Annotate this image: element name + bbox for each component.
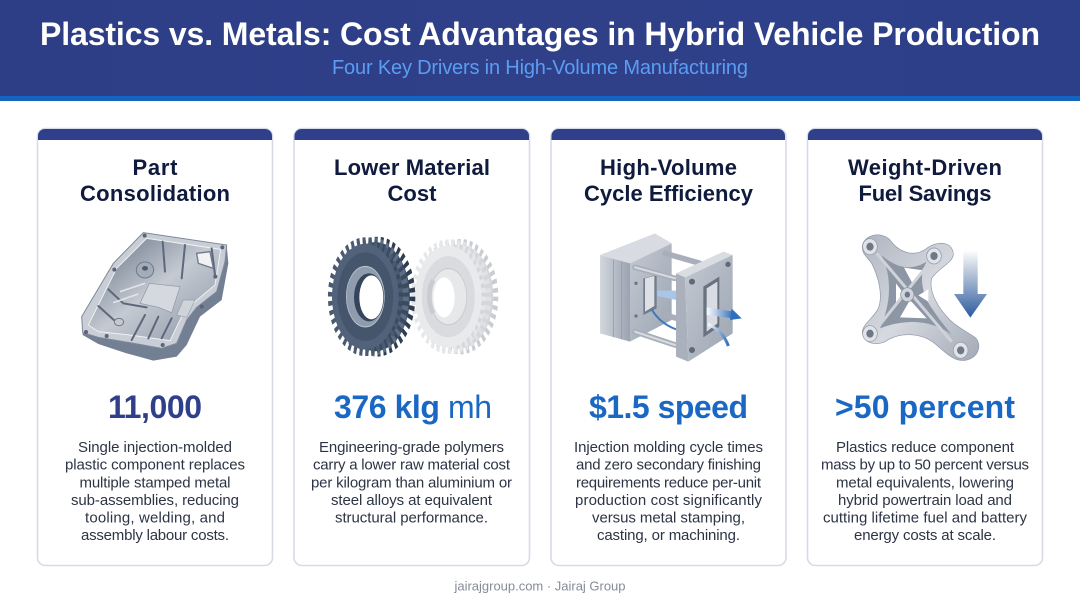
heading: part consolidation: Part <box>132 155 178 180</box>
panel: high-volume cycle efficiency <box>551 128 786 566</box>
icon: lightweight bracket with down arrow <box>862 235 987 360</box>
body text: weight-driven fuel savings: energy costs at scale. <box>854 527 996 544</box>
heading: weight-driven fuel savings: Fuel Savings <box>858 181 992 206</box>
subtitle: Four Key Drivers in High-Volume Manufacturing <box>332 57 748 79</box>
heading: part consolidation: Consolidation <box>80 181 230 206</box>
body text: weight-driven fuel savings: Plastics reduce component <box>836 439 1015 456</box>
header band <box>0 0 1080 101</box>
icon: metal oil pan <box>82 233 228 361</box>
body text: high-volume cycle efficiency: versus metal stamping, <box>592 510 745 526</box>
icon: injection mold <box>600 233 742 362</box>
body text: part consolidation: multiple stamped metal <box>80 474 230 492</box>
arrow: weight reduction <box>954 250 987 318</box>
body text: part consolidation <box>65 439 245 544</box>
footer: jairajgroup.com · Jairaj Group <box>454 578 626 594</box>
body text: lower material cost <box>311 439 512 526</box>
panel: weight-driven fuel savings <box>808 128 1042 566</box>
body text: lower material cost: structural performance. <box>335 510 488 526</box>
panel: lower material cost <box>294 128 530 566</box>
body text: part consolidation: tooling, welding, and <box>85 510 225 526</box>
heading: high-volume cycle efficiency <box>584 155 754 206</box>
title: Plastics vs. Metals: Cost Advantages in Hybrid Vehicle Production <box>40 16 1040 52</box>
icon: plastic and steel gears <box>331 242 495 351</box>
body text: high-volume cycle efficiency: casting, or machining. <box>597 527 740 544</box>
body text: high-volume cycle efficiency: Injection molding cycle times <box>574 439 763 456</box>
stat: >50 percent: >50 percent <box>835 389 1015 425</box>
light plastic gear <box>414 244 495 349</box>
body text: high-volume cycle efficiency: and zero secondary finishing <box>576 456 761 474</box>
body text: lower material cost: Engineering-grade polymers <box>319 439 504 456</box>
heading: high-volume cycle efficiency: High-Volume <box>600 155 737 180</box>
panel: part consolidation <box>38 128 272 566</box>
body text: part consolidation: plastic component replaces <box>65 456 245 474</box>
stat: 376 klg mh: 376 klg mh <box>334 389 492 425</box>
heading: lower material cost: Cost <box>388 181 437 206</box>
heading: weight-driven fuel savings <box>848 155 1002 206</box>
heading: high-volume cycle efficiency: Cycle Efficiency <box>584 181 754 206</box>
dark steel gear <box>331 242 412 351</box>
body text: weight-driven fuel savings <box>821 439 1029 544</box>
heading: weight-driven fuel savings: Weight-Driven <box>848 155 1002 180</box>
body text: part consolidation: sub-assemblies, reducing <box>71 492 239 509</box>
body text: part consolidation: Single injection-molded <box>78 439 232 456</box>
body text: weight-driven fuel savings: metal equivalents, lowering <box>836 474 1014 492</box>
heading: lower material cost: Lower Material <box>334 155 490 180</box>
body text: high-volume cycle efficiency: production cost significantly <box>575 492 762 509</box>
body text: weight-driven fuel savings: cutting lifetime fuel and battery <box>823 510 1028 526</box>
stat: $1.5 speed: $1.5 speed <box>589 389 748 425</box>
body text: lower material cost: per kilogram than aluminium or <box>311 474 512 492</box>
body text: lower material cost: steel alloys at equivalent <box>331 492 493 509</box>
heading: lower material cost <box>334 155 490 206</box>
stat: 11,000: 11,000 <box>108 389 202 425</box>
body text: weight-driven fuel savings: hybrid powertrain load and <box>838 492 1012 509</box>
heading: part consolidation <box>80 155 230 206</box>
body text: part consolidation: assembly labour costs. <box>81 527 229 544</box>
body text: high-volume cycle efficiency <box>574 439 763 544</box>
body text: high-volume cycle efficiency: requirements reduce per-unit <box>576 474 762 492</box>
body text: weight-driven fuel savings: mass by up to 50 percent versus <box>821 456 1029 474</box>
body text: lower material cost: carry a lower raw material cost <box>313 456 511 474</box>
